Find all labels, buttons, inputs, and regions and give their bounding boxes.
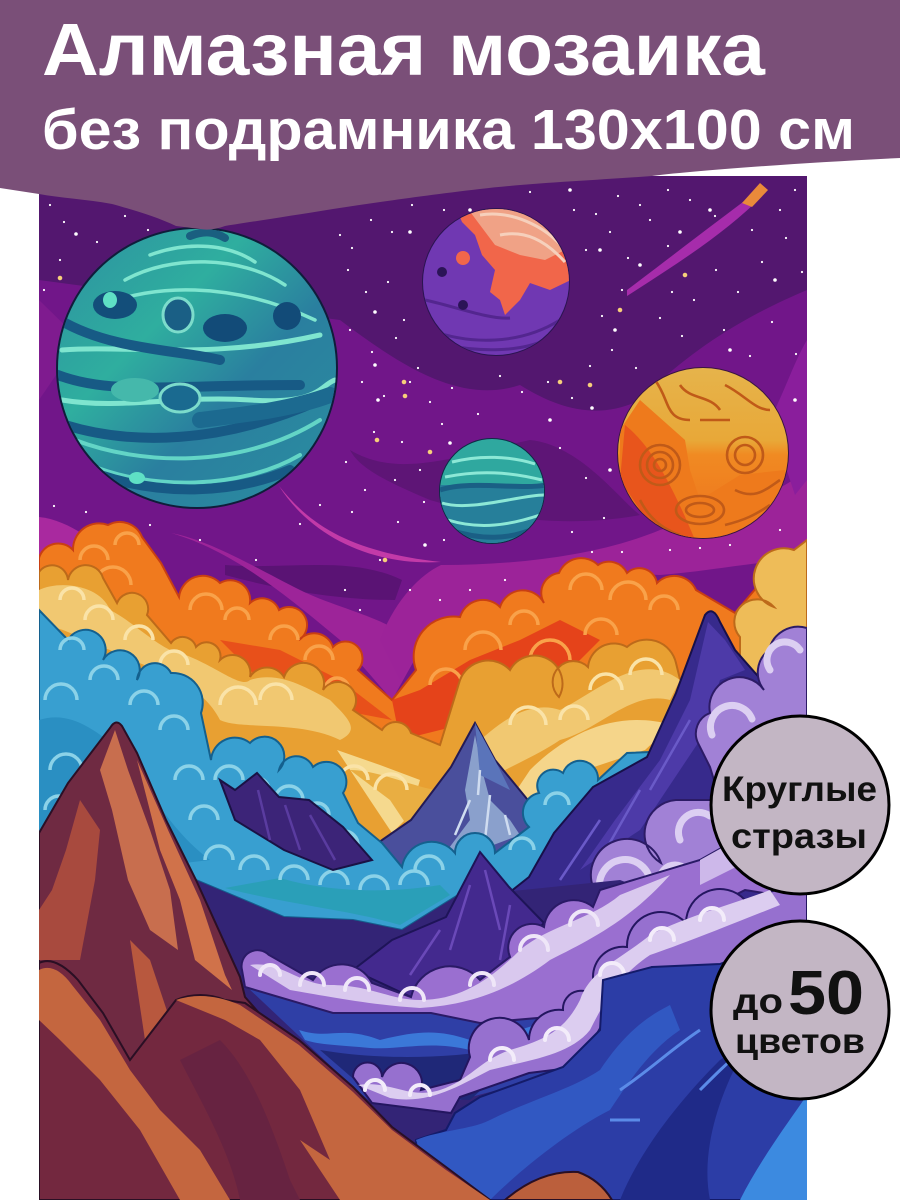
cloud: lower lilac <box>353 880 807 1113</box>
night sky <box>39 176 807 736</box>
badge: up to 50 colours <box>711 921 889 1099</box>
waves: middle blue lake <box>250 990 547 1100</box>
badge: up to 50 colours: до <box>733 982 783 1021</box>
cloud: yellow <box>39 565 700 860</box>
lower dark ground <box>197 880 624 1143</box>
badge: round rhinestones: Круглые <box>722 770 877 809</box>
cloud: right yellow behind peak <box>733 538 807 674</box>
mountain: small dark centre peak <box>353 852 544 997</box>
cloud: lavender band <box>240 848 771 1024</box>
cloud: violet right column <box>590 626 807 883</box>
cloud: orange <box>39 520 760 744</box>
mountain: tall purple right peak <box>512 610 760 899</box>
badge: round rhinestones: стразы <box>731 817 867 856</box>
badge: up to 50 colours: цветов <box>735 1022 865 1061</box>
mountain: centre peak <box>380 721 528 865</box>
mountain: dark left peak <box>220 773 372 870</box>
planet: orange swirls <box>615 365 795 545</box>
title line 1: Алмазная мозаика <box>42 8 766 91</box>
badge: round rhinestones <box>711 716 889 894</box>
cloud: blue <box>39 608 649 930</box>
header banner <box>0 0 900 230</box>
stars <box>44 190 802 610</box>
planet: large teal <box>55 225 340 515</box>
planet: purple and coral <box>420 205 575 360</box>
mountain: big brown peak <box>39 722 259 1058</box>
mountain: brown foreground ridge <box>39 961 612 1200</box>
badge: up to 50 colours: 50 <box>788 959 864 1028</box>
planet: small teal <box>439 438 545 544</box>
artwork: space landscape <box>39 176 807 1200</box>
waves: right blue foreground <box>415 962 807 1200</box>
title line 2: без подрамника 130х100 см <box>42 98 855 162</box>
